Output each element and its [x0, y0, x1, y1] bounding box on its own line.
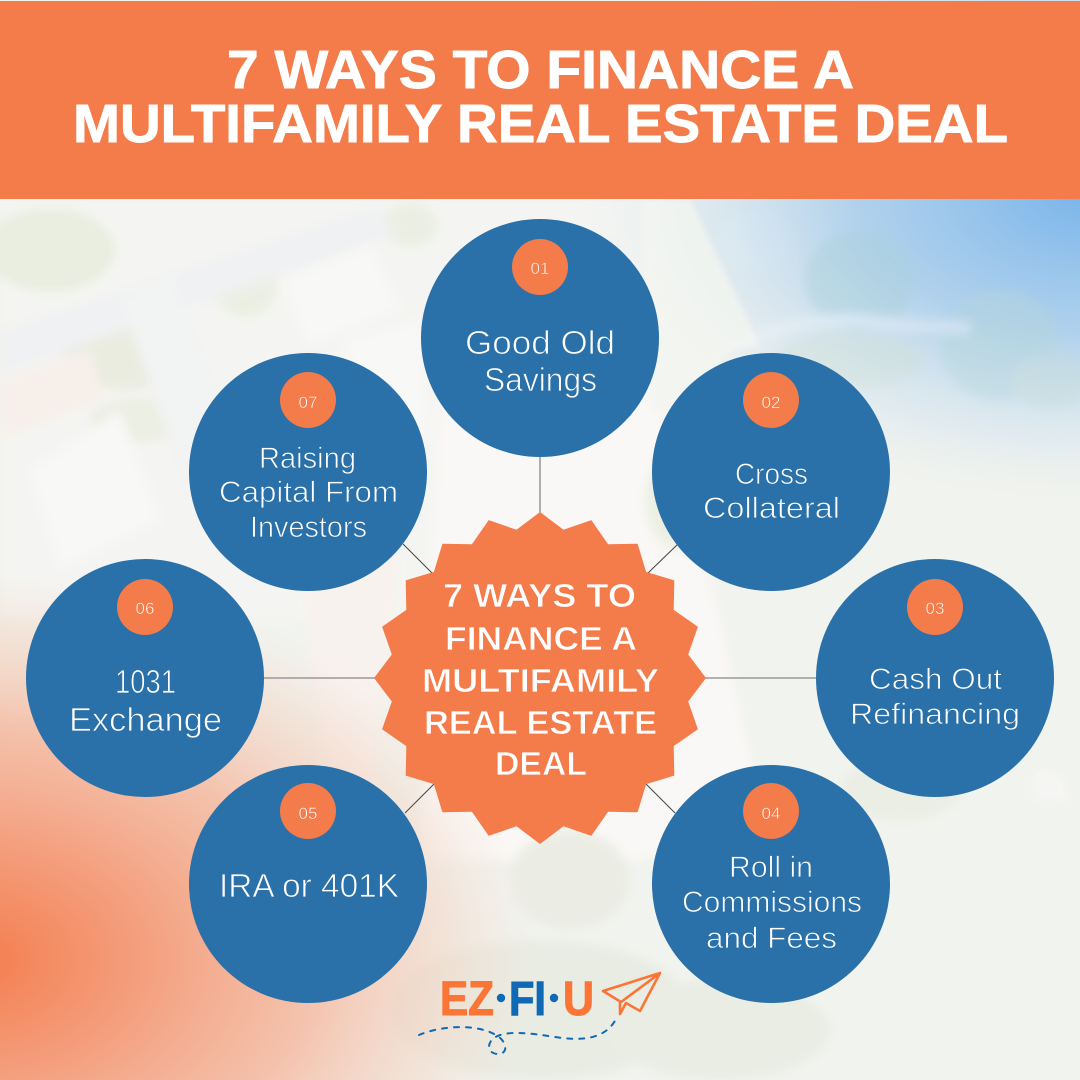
label: Cross Collateral: Collateral — [703, 492, 840, 525]
label: Good Old Savings: Good Old — [465, 324, 615, 361]
badge 02 — [743, 372, 799, 428]
label: Raising Capital From Investors: Capital From — [219, 476, 398, 509]
badge 07: 07 — [299, 393, 317, 412]
label: IRA or 401K: IRA or 401K — [219, 867, 399, 904]
label: Roll in Commissions and Fees: Commissions — [682, 886, 862, 919]
logo: EZ-FI-U with paper plane — [419, 973, 660, 1054]
circle 04: Roll in Commissions and Fees — [652, 765, 890, 1003]
center starburst: 7 ways to finance a multifamily real estate deal: MULTIFAMILY — [422, 662, 659, 699]
logo: EZ-FI-U with paper plane: FI — [509, 973, 546, 1026]
label: Cross Collateral — [703, 458, 840, 525]
center starburst: 7 ways to finance a multifamily real estate deal: FINANCE A — [445, 620, 637, 657]
badge 01 — [512, 239, 568, 295]
label: Roll in Commissions and Fees: Roll in — [729, 851, 813, 884]
connector lines from center burst to the seven circles — [262, 455, 818, 813]
badge 01: 01 — [531, 259, 549, 278]
badge 05 — [280, 783, 336, 839]
circle 03: Cash Out Refinancing — [816, 559, 1054, 797]
title banner — [0, 1, 1080, 199]
logo: EZ-FI-U with paper plane: EZ — [440, 973, 494, 1026]
badge 04 — [743, 783, 799, 839]
circle 02: Cross Collateral — [652, 353, 890, 591]
center starburst: 7 ways to finance a multifamily real estate deal — [374, 512, 706, 844]
label: 1031 Exchange: 1031 — [115, 663, 176, 700]
label: Cross Collateral: Cross — [735, 458, 808, 491]
label: Raising Capital From Investors: Investors — [250, 511, 367, 544]
circle 05: IRA or 401K — [189, 765, 427, 1003]
badge 07 — [280, 372, 336, 428]
label: Cash Out Refinancing: Cash Out — [869, 663, 1003, 696]
label: 1031 Exchange — [69, 663, 222, 738]
badge 02: 02 — [762, 393, 780, 412]
label: 1031 Exchange: Exchange — [69, 701, 222, 738]
label: Raising Capital From Investors — [219, 442, 398, 544]
title banner: MULTIFAMILY REAL ESTATE DEAL — [73, 94, 1008, 154]
circle 01: Good Old Savings — [421, 219, 659, 457]
badge 03: 03 — [926, 599, 944, 618]
title banner: 7 WAYS TO FINANCE A — [227, 40, 854, 100]
center starburst: 7 ways to finance a multifamily real estate deal: 7 WAYS TO — [443, 577, 636, 614]
badge 06 — [117, 579, 173, 635]
circle 07: Raising Capital From Investors — [189, 353, 427, 591]
label: Cash Out Refinancing: Refinancing — [850, 698, 1020, 731]
icon: paper plane — [603, 973, 660, 1014]
dashed flight path — [419, 1019, 616, 1054]
label: Raising Capital From Investors: Raising — [259, 442, 356, 475]
badge 06: 06 — [136, 599, 154, 618]
label: Good Old Savings: Savings — [484, 361, 597, 398]
label: Roll in Commissions and Fees: and Fees — [706, 922, 837, 955]
label: Cash Out Refinancing — [850, 663, 1020, 731]
label: Good Old Savings — [465, 324, 615, 398]
label: Roll in Commissions and Fees — [682, 851, 862, 955]
badge 05: 05 — [299, 804, 317, 823]
logo: EZ-FI-U with paper plane: U — [563, 973, 594, 1026]
circle 06: 1031 Exchange — [26, 559, 264, 797]
badge 03 — [907, 579, 963, 635]
badge 04: 04 — [762, 804, 780, 823]
center starburst: 7 ways to finance a multifamily real estate deal: DEAL — [495, 745, 587, 782]
center starburst: 7 ways to finance a multifamily real estate deal: REAL ESTATE — [424, 704, 657, 741]
